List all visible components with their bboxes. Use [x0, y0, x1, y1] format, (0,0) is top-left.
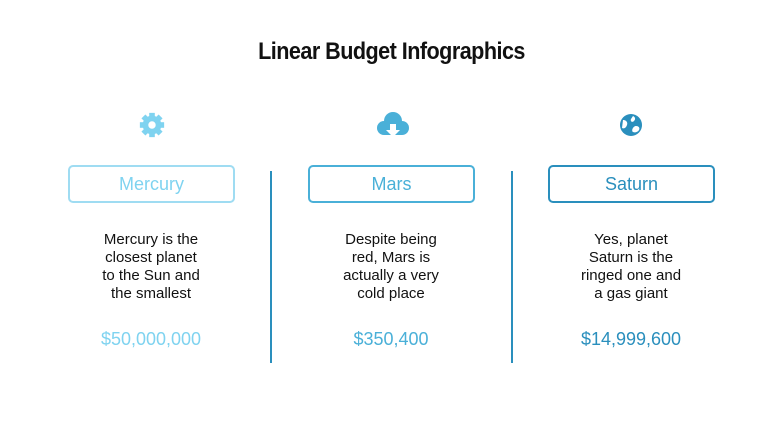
icon: cloud download [377, 112, 409, 135]
description: red, Mars is [352, 249, 430, 266]
description: the smallest [111, 285, 191, 302]
label box: Mercury [119, 174, 184, 194]
description: Saturn is the [589, 249, 673, 266]
icon: globe [620, 114, 642, 136]
label box [308, 165, 475, 203]
price: $50,000,000 [101, 329, 201, 349]
label box [548, 165, 715, 203]
column: Mars [308, 112, 475, 349]
description [581, 231, 681, 302]
column: Saturn [548, 114, 715, 349]
description [343, 231, 439, 302]
price: $14,999,600 [581, 329, 681, 349]
description: a gas giant [594, 285, 668, 302]
description: cold place [357, 285, 425, 302]
divider line [511, 171, 513, 363]
icon: gear [140, 112, 164, 138]
label box: Saturn [605, 174, 658, 194]
description: actually a very [343, 267, 439, 284]
description [102, 231, 200, 302]
label box: Mars [372, 174, 412, 194]
title: Linear Budget Infographics [258, 38, 525, 65]
description: Yes, planet [594, 231, 668, 248]
description: closest planet [105, 249, 197, 266]
price: $350,400 [353, 329, 429, 349]
label box [68, 165, 235, 203]
description: to the Sun and [102, 267, 200, 284]
column: Mercury [68, 112, 235, 349]
description: Despite being [345, 231, 437, 248]
description: ringed one and [581, 267, 681, 284]
description: Mercury is the [104, 231, 198, 248]
divider line [270, 171, 272, 363]
